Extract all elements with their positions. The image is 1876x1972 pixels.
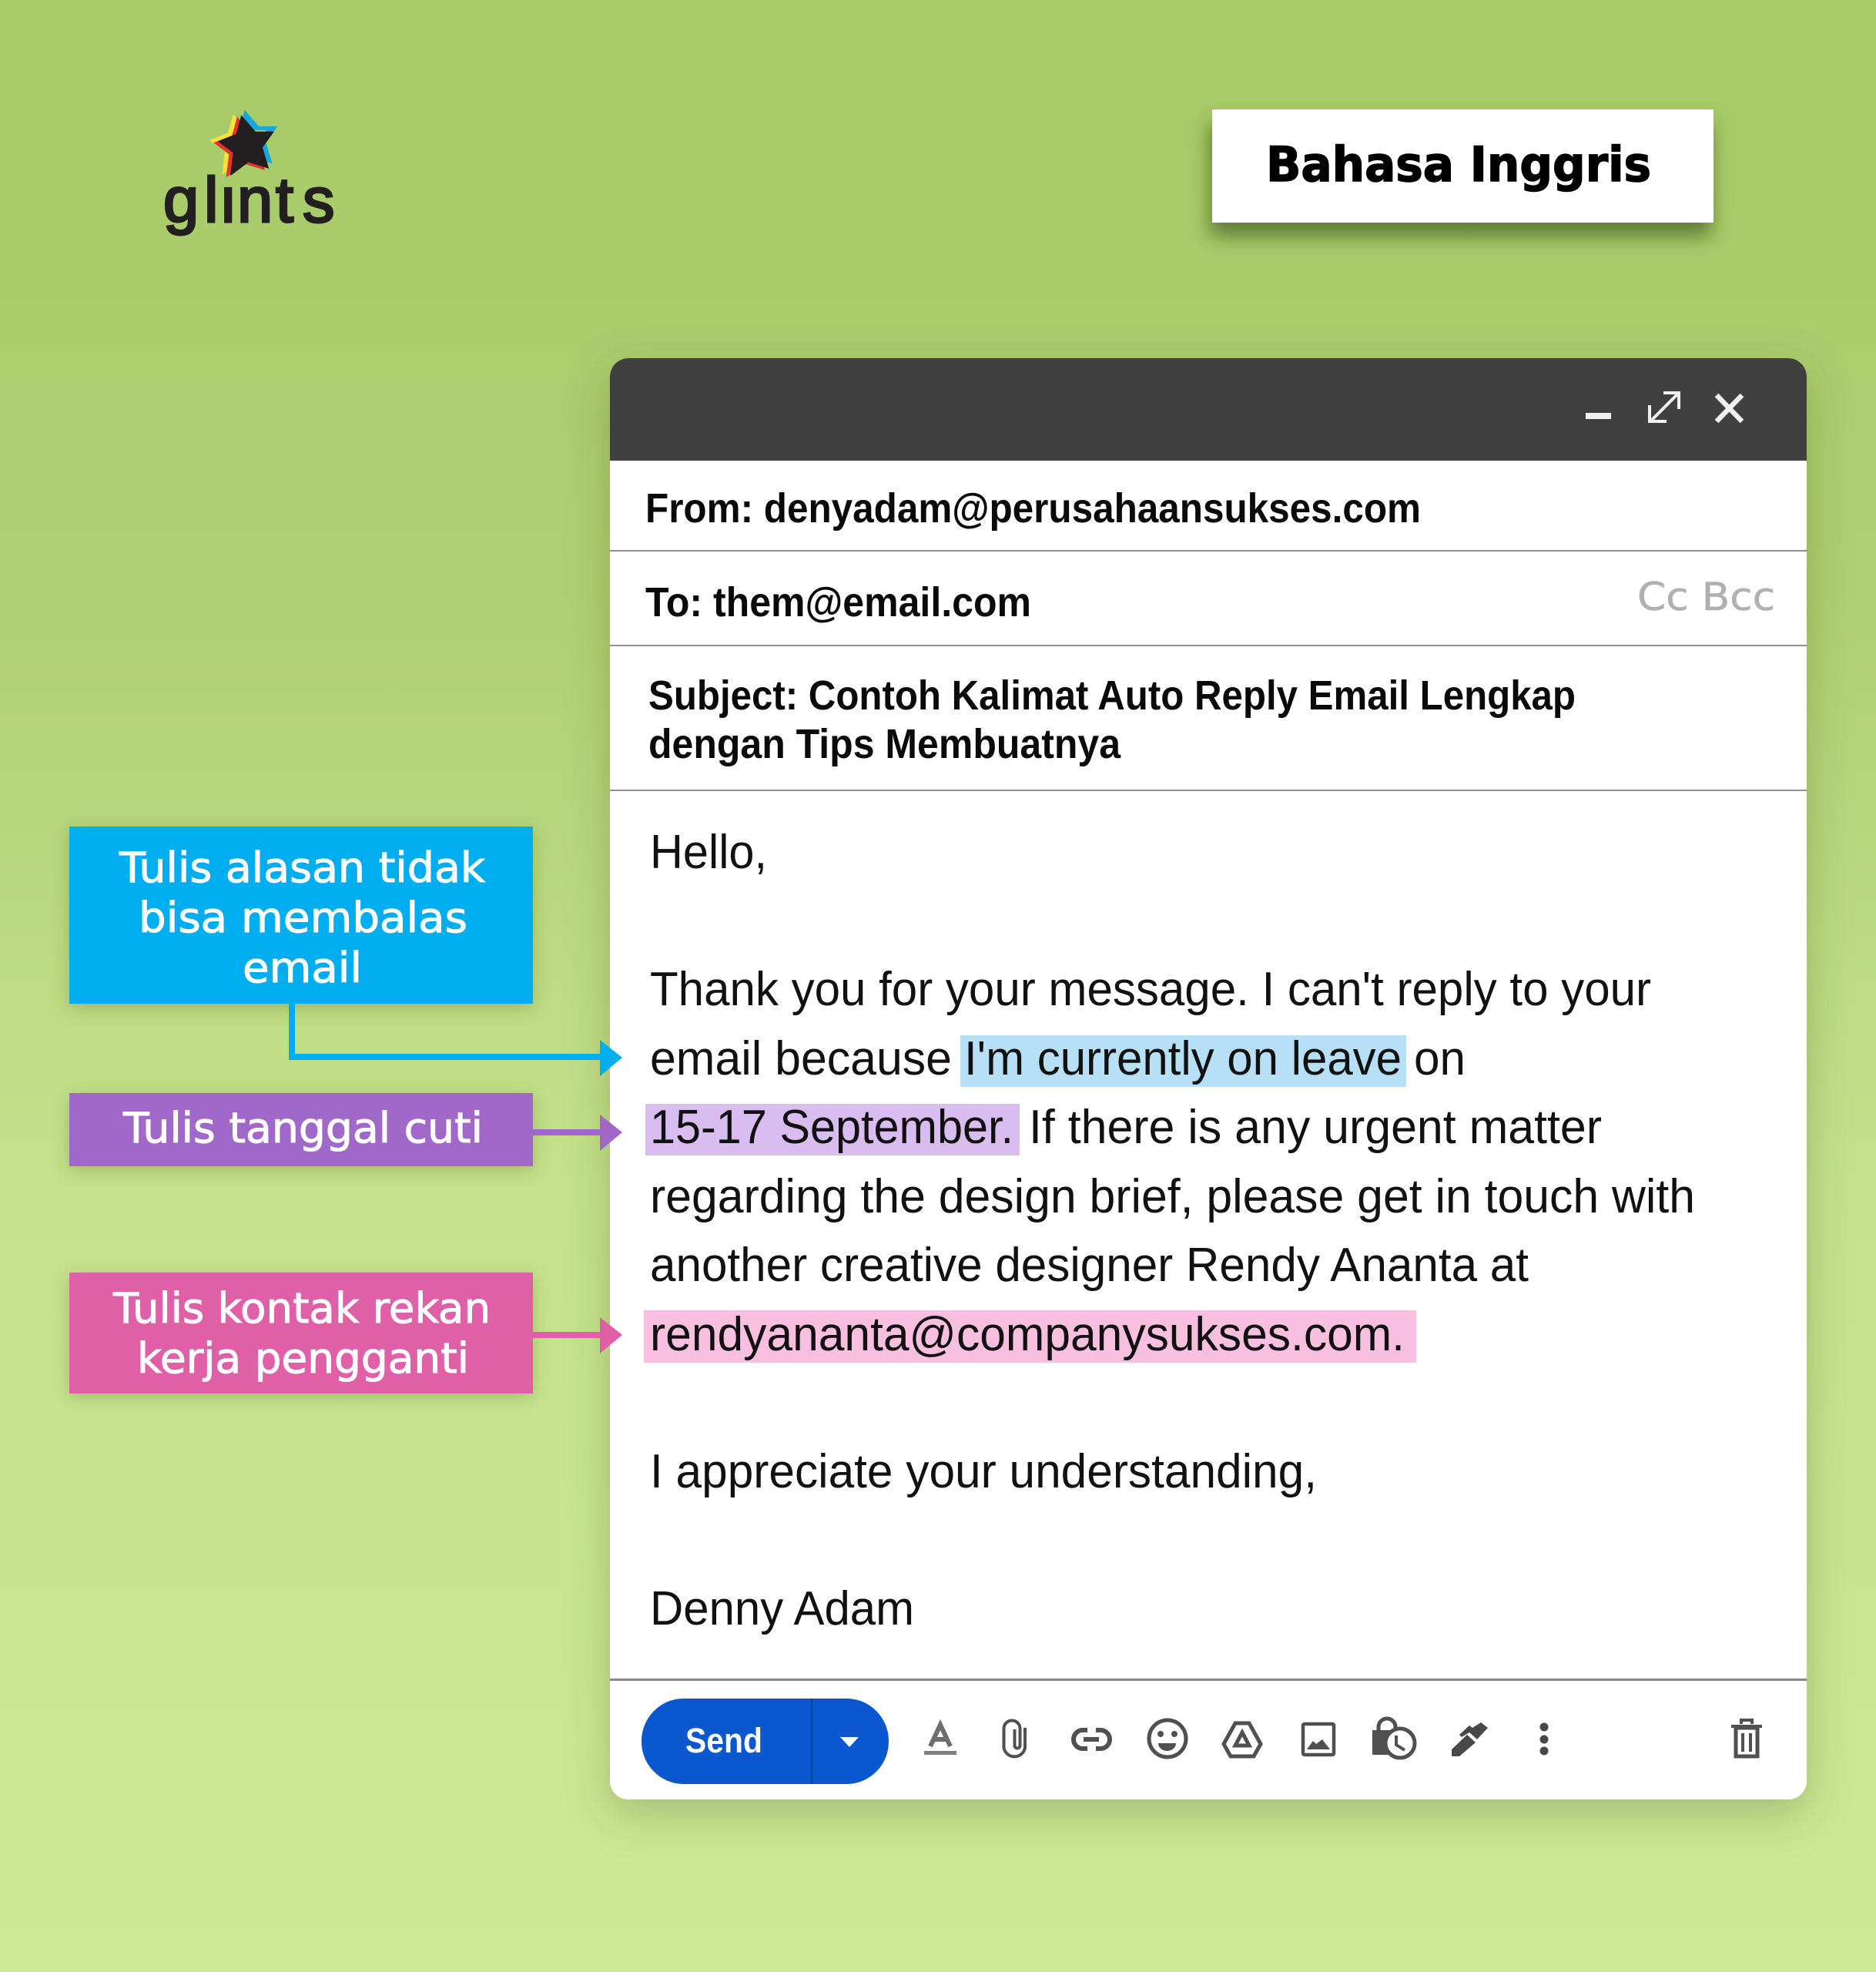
toolbar icons [924, 1719, 1762, 1758]
icon: attach [1004, 1721, 1025, 1756]
email body text: 15-17 September. [650, 1101, 1013, 1154]
email body text: another creative designer Rendy Ananta at [650, 1239, 1529, 1292]
icon: text format [924, 1725, 956, 1755]
icon: signature pen [1452, 1722, 1488, 1756]
window title bar [610, 358, 1807, 461]
icon: photo [1303, 1724, 1334, 1755]
subject field [648, 672, 1576, 767]
send button: Send [685, 1721, 762, 1760]
email body text: I appreciate your understanding, [650, 1445, 1317, 1498]
icon: drive [1224, 1723, 1261, 1756]
icon: star [209, 110, 277, 177]
icon: expand [1650, 393, 1679, 421]
callout: kontak: Tulis kontak rekan [112, 1284, 491, 1333]
icon: minimize [1586, 413, 1611, 419]
label: Bahasa Inggris: Bahasa Inggris [1266, 136, 1651, 193]
panel: email compose window [610, 358, 1807, 1799]
from field: From: denyadam@perusahaansukses.com [645, 485, 1421, 532]
email body text [650, 826, 1695, 1635]
icon: confidential lock clock [1372, 1719, 1415, 1758]
email body text: on [1414, 1032, 1466, 1085]
email body text: Denny Adam [650, 1582, 914, 1635]
callout: alasan [69, 827, 533, 1004]
arrow: tanggal [533, 1115, 622, 1151]
email body text: I'm currently on leave [964, 1032, 1402, 1085]
highlight: leave [960, 1035, 1406, 1087]
icon: trash [1731, 1720, 1762, 1756]
callout: kontak [69, 1273, 533, 1393]
icon: link [1074, 1730, 1110, 1749]
email body text: email because [650, 1032, 952, 1085]
arrow: alasan [292, 1004, 622, 1076]
email body text: If there is any urgent matter [1029, 1101, 1602, 1154]
to field: To: them@email.com [645, 579, 1031, 625]
icon: emoji [1149, 1720, 1186, 1757]
callout: tanggal: Tulis tanggal cuti [122, 1104, 483, 1152]
callout: alasan: bisa membalas [139, 894, 467, 942]
email body text: Hello, [650, 826, 767, 879]
callout: tanggal [69, 1093, 533, 1166]
logo: glints [163, 110, 334, 236]
email body text: regarding the design brief, please get in touch with [650, 1170, 1695, 1223]
callout: alasan: Tulis alasan tidak [119, 843, 486, 892]
callout: kontak: kerja pengganti [137, 1334, 469, 1383]
email body text: Thank you for your message. I can't reply to your [650, 963, 1651, 1016]
send button [642, 1699, 889, 1784]
highlight: contact [644, 1310, 1416, 1363]
label: Bahasa Inggris [1212, 109, 1714, 223]
highlight: dates [645, 1104, 1020, 1155]
cc bcc: Cc Bcc [1637, 575, 1775, 619]
email body text: rendyananta@companysukses.com. [650, 1308, 1405, 1361]
callout: alasan: email [243, 944, 362, 992]
subject field: dengan Tips Membuatnya [648, 721, 1121, 767]
arrow: kontak [533, 1317, 622, 1353]
icon: close [1717, 395, 1742, 421]
icon: more [1540, 1722, 1548, 1755]
wordmark: glints [163, 164, 334, 236]
subject field: Subject: Contoh Kalimat Auto Reply Email Lengkap [648, 672, 1576, 719]
